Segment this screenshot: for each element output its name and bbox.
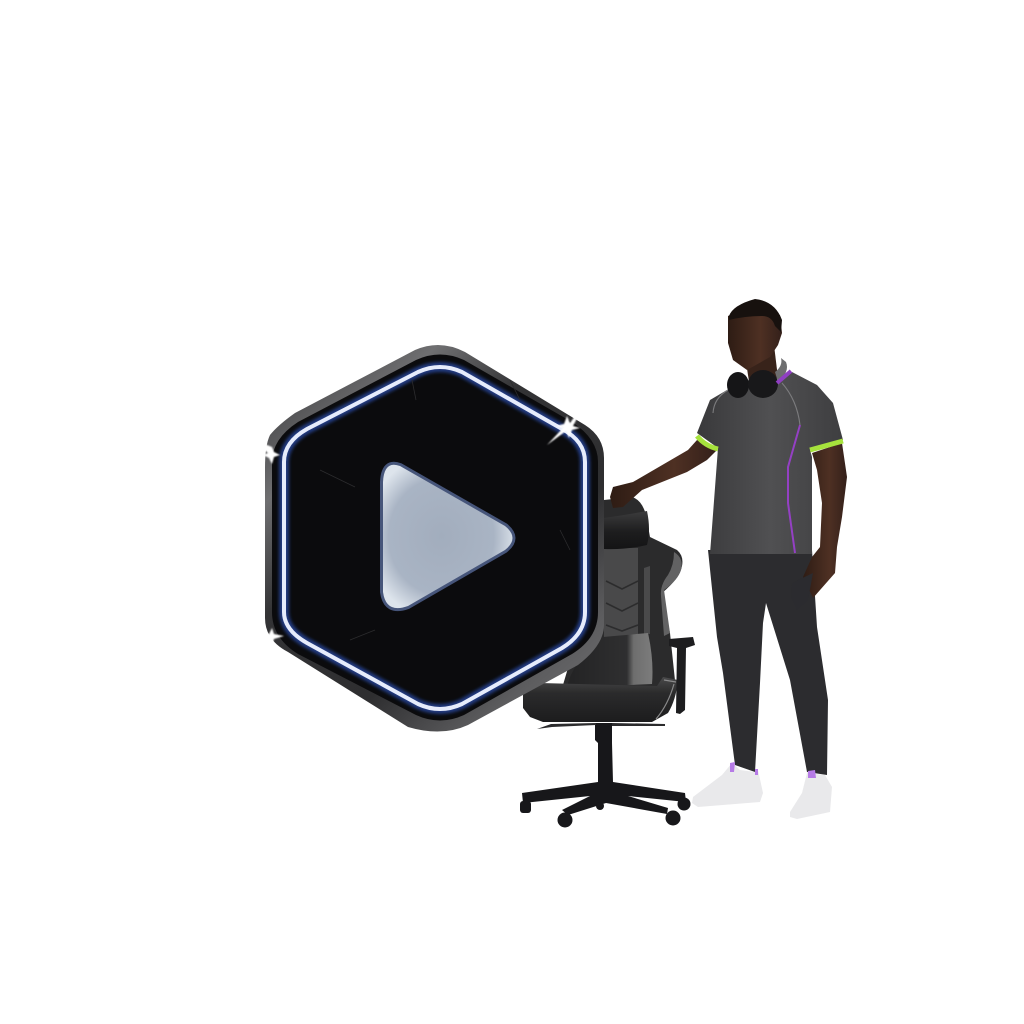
hexagon play badge (250, 345, 604, 732)
lumbar pillow (567, 633, 652, 688)
backrest side panel (644, 566, 650, 634)
right arm (803, 443, 847, 598)
shirt grey seams (713, 383, 800, 425)
right sneaker (790, 773, 832, 819)
play triangle halo (383, 465, 512, 608)
purple collar (777, 371, 791, 383)
gaming chair (520, 497, 695, 828)
hexagon dark face (272, 354, 598, 720)
hair (729, 299, 782, 332)
neon ring (284, 367, 585, 709)
headphone band (775, 358, 787, 382)
left ear cup (727, 372, 749, 398)
standing man (610, 299, 847, 819)
left sneaker (692, 763, 763, 807)
seat side trim (656, 680, 676, 719)
head (728, 303, 782, 370)
hexagon outer rim (265, 345, 604, 732)
surface scratches (320, 380, 570, 640)
sparkles (250, 398, 588, 646)
chair base (520, 723, 690, 828)
left arm (610, 440, 717, 508)
backrest centre panel (604, 548, 638, 640)
headphones (727, 358, 787, 398)
backrest side bolster highlight (661, 552, 682, 636)
neon ring glow (284, 367, 585, 709)
shirt (697, 372, 843, 554)
purple shoe tabs (730, 762, 816, 778)
shirt green cuffs (697, 436, 843, 450)
chair seat (523, 677, 678, 722)
backrest chevrons (606, 581, 638, 631)
seat under plate and lever (537, 723, 665, 729)
headrest (604, 511, 649, 549)
neck (746, 345, 778, 388)
right ear cup (748, 370, 778, 398)
armrest (669, 637, 695, 714)
chair backrest (560, 497, 682, 695)
shirt purple seam (788, 425, 800, 553)
play triangle (383, 465, 512, 608)
trousers (708, 550, 828, 775)
game controller (791, 573, 813, 610)
